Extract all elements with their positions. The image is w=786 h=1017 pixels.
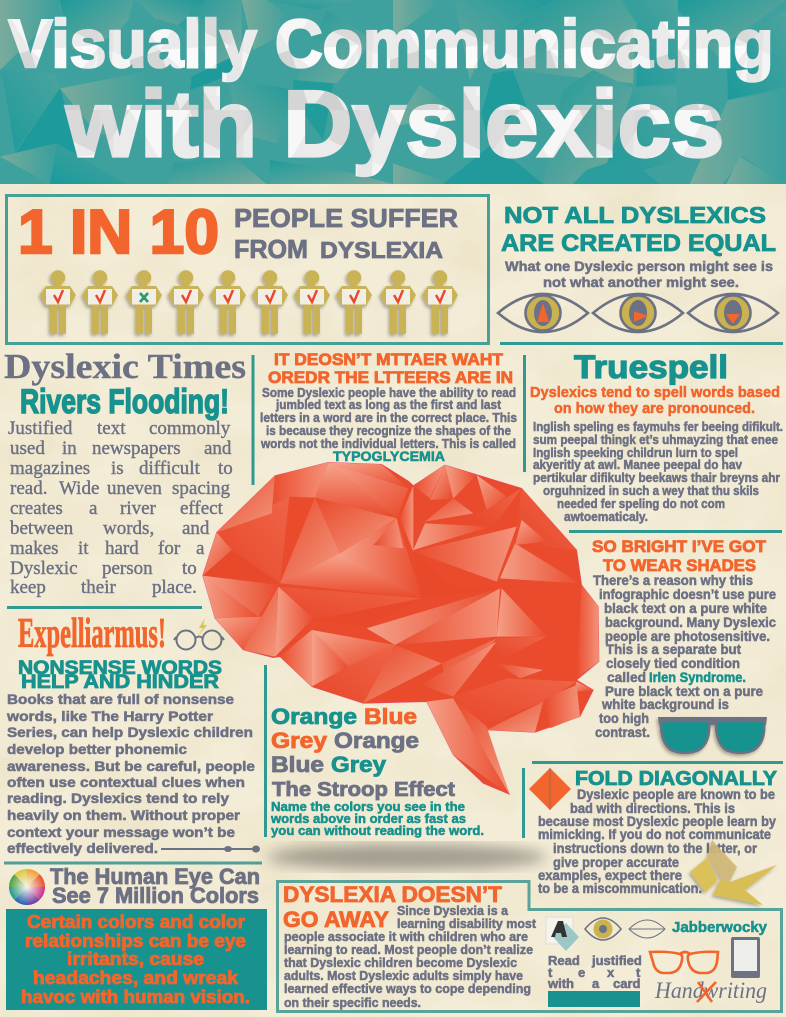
callout: [6, 909, 267, 1010]
justified paragraph: keep: [10, 577, 46, 598]
body text: TYPOGLYCEMIA: [333, 448, 445, 464]
subheading: on how they are pronounced.: [554, 400, 755, 417]
callout: headaches, and wreak: [33, 968, 239, 988]
justified paragraph: it: [78, 538, 89, 559]
body text: people associate it with children who are: [284, 929, 528, 944]
title line 2: with Dyslexics: [65, 71, 724, 176]
body text: effectively delivered.: [7, 840, 158, 856]
justified paragraph: magazines: [10, 458, 90, 479]
body text: on their specific needs.: [284, 995, 421, 1010]
icon: three eyes: [498, 294, 778, 332]
phonetic text: Inglish speeking childrun lurn to spel: [533, 445, 738, 460]
panel: typoglycemia: [252, 350, 517, 485]
subheading: Dyslexics tend to spell words based: [530, 384, 780, 401]
color words: [271, 704, 419, 777]
body text: heavily on them. Without proper: [7, 807, 241, 823]
body text: develop better phonemic: [7, 741, 187, 757]
heading: Truespell: [574, 349, 728, 385]
body text: jumbled text as long as the first and last: [275, 397, 502, 412]
heading: [268, 350, 513, 387]
body text: [538, 786, 776, 896]
body text: reading. Dyslexics tend to rely: [7, 790, 229, 806]
icon: orange glasses: [650, 952, 718, 973]
heading: FOLD DIAGONALLY: [575, 768, 778, 790]
instructions: words above in order as fast as: [270, 811, 466, 826]
justified paragraph: a: [196, 538, 205, 559]
justified paragraph: a: [89, 498, 98, 519]
justified paragraph: Dyslexic: [10, 558, 78, 579]
phonetic text: needed fer speling do not com: [557, 496, 725, 511]
panel: nonsense words: [4, 611, 262, 864]
subtext: What one Dyslexic person might see is: [505, 258, 773, 274]
body text: is because they recognize the shapes of the: [266, 423, 511, 438]
justified paragraph: person: [102, 558, 153, 579]
color words: Orange: [271, 704, 357, 729]
icon: paper crane: [690, 840, 777, 905]
justified paragraph: read.: [10, 478, 47, 499]
instructions: Name the colors you see in the: [271, 799, 465, 814]
color words: Grey: [331, 752, 387, 777]
justified paragraph: hard: [105, 538, 139, 559]
phonetic text: orguhnized in such a wey that thu skils: [543, 483, 759, 498]
body text: Series, can help Dyslexic children: [7, 724, 253, 740]
body text: context your message won’t be: [7, 824, 235, 840]
icon: crossed-out handwriting: Handwriting: [654, 978, 767, 1003]
icon: wand: [161, 846, 260, 852]
heading: HELP AND HINDER: [21, 672, 219, 693]
justified paragraph: makes: [10, 538, 59, 559]
justified card text: x: [607, 965, 615, 980]
title banner: [0, 0, 786, 184]
heading: SO BRIGHT I’VE GOT: [592, 537, 767, 556]
heading: [18, 658, 222, 693]
body text: too high: [599, 710, 649, 726]
heading: GO AWAY: [283, 907, 389, 932]
justified card text: t: [548, 965, 553, 980]
stat caption: FROM: [234, 234, 308, 264]
justified card text: card: [613, 976, 641, 991]
masthead: Dyslexic Times: [4, 347, 246, 386]
body text: examples, expect there: [538, 867, 682, 883]
justified paragraph: for: [158, 538, 181, 559]
heading: NOT ALL DYSLEXICS: [504, 202, 766, 228]
justified paragraph: and: [204, 438, 232, 459]
body text: words not the individual letters. This is called: [260, 436, 516, 451]
justified paragraph: creates: [10, 498, 63, 519]
heading: The Human Eye Can: [50, 864, 260, 889]
justified paragraph: their: [81, 577, 116, 598]
body text: words, like The Harry Potter: [6, 708, 214, 724]
justified paragraph: in: [62, 438, 77, 459]
justified paragraph: difficult: [139, 458, 201, 479]
body text: There’s a reason why this: [593, 572, 753, 588]
illustration: polygon brain: [203, 462, 599, 794]
body text: that Dyslexic children become Dyslexic: [284, 955, 517, 970]
body text: mimicking. If you do not communicate: [538, 826, 771, 842]
justified card text: Read: [548, 953, 580, 968]
justified paragraph: [8, 418, 233, 598]
body text: [284, 903, 537, 1010]
heading: NONSENSE WORDS: [18, 658, 222, 679]
instructions: you can without reading the word.: [271, 823, 484, 838]
body text: instructions down to the letter, or: [553, 840, 757, 856]
body text: called: [607, 669, 646, 685]
body text: background. Many Dyslexic: [605, 614, 776, 630]
icon: overlay tile: [546, 917, 579, 951]
heading: IT DEOSN’T MTTAER WAHT: [274, 350, 504, 369]
justified paragraph: spacing: [172, 478, 231, 499]
headline: Expelliarmus: Expelliarmus!: [18, 611, 166, 657]
phonetic text: [533, 419, 783, 524]
panel: truespell: [523, 349, 783, 533]
stat caption: PEOPLE SUFFER: [234, 203, 458, 233]
justified card text: a: [592, 976, 600, 991]
body text: Since Dyslexia is a: [397, 903, 509, 918]
pictogram: ten people: [40, 270, 458, 334]
justified paragraph: commonly: [149, 418, 231, 439]
body text: [260, 385, 517, 464]
panel: 1 in 10: [6, 196, 488, 344]
heading: See 7 Million Colors: [52, 883, 259, 908]
color words: Grey: [271, 728, 328, 753]
justified paragraph: text: [97, 418, 126, 439]
body text: Some Dyslexic people have the ability to read: [262, 385, 516, 400]
icon: sunglasses: [658, 717, 767, 753]
justified paragraph: to: [218, 458, 233, 479]
justified card text: [547, 953, 642, 1007]
callout: havoc with human vision.: [21, 987, 250, 1007]
body text: Pure black text on a pure: [605, 683, 763, 699]
justified paragraph: river: [120, 498, 157, 519]
color words: Orange: [334, 728, 419, 753]
body text: white background is: [601, 696, 729, 712]
justified paragraph: to: [182, 558, 197, 579]
phonetic text: akyeritly at awl. Manee peepal do hav: [533, 457, 743, 472]
justified paragraph: words,: [103, 518, 154, 539]
heading: OREDR THE LTTEERS ARE IN: [268, 368, 513, 387]
heading: TO WEAR SHADES: [603, 556, 756, 575]
body text: adults. Most Dyslexic adults simply have: [284, 968, 523, 983]
justified card text: t: [636, 965, 641, 980]
icon: tablet: [731, 937, 760, 978]
justified paragraph: newspapers: [92, 438, 181, 459]
body text: give proper accurate: [553, 854, 679, 870]
panel: not all dyslexics: [498, 202, 783, 345]
subheading: [530, 384, 780, 417]
subtext: [505, 258, 773, 290]
body text: closely tied condition: [606, 655, 740, 671]
justified paragraph: Wide: [59, 478, 99, 499]
panel: dyslexic times: [4, 347, 246, 609]
justified paragraph: is: [111, 458, 124, 479]
callout: Certain colors and color: [27, 912, 245, 932]
body text: This is a separate but: [606, 641, 741, 657]
panel: fold diagonally: [522, 761, 783, 905]
headline: Rivers Flooding!: [20, 383, 229, 421]
justified paragraph: effect: [180, 498, 224, 519]
icon: folded paper diamond: [529, 768, 571, 810]
body text: learning disability most: [397, 916, 537, 931]
callout: relationships can be eye: [25, 931, 246, 951]
body text: infographic doesn’t use pure: [599, 586, 776, 602]
panel: so bright: [592, 537, 776, 753]
heading: [50, 864, 260, 908]
body text: letters in a word are in the correct place. This: [260, 410, 517, 425]
icon: colour wheel: [9, 869, 45, 905]
body text: [6, 691, 255, 856]
body text: Books that are full of nonsense: [7, 691, 234, 707]
heading: [283, 882, 503, 932]
heading: The Stroop Effect: [272, 779, 455, 801]
justified card text: e: [578, 965, 585, 980]
body text: people are photosensitive.: [605, 628, 770, 644]
body text: bad with directions. This is: [570, 800, 735, 816]
justified paragraph: used: [10, 438, 45, 459]
body text: to be a miscommunication.: [538, 880, 702, 896]
justified paragraph: uneven: [107, 478, 162, 499]
heading: [501, 202, 776, 257]
justified paragraph: Justified: [8, 418, 73, 439]
instructions: [270, 799, 484, 838]
justified paragraph: and: [182, 518, 210, 539]
justified card text: with: [547, 976, 574, 991]
subtext: not what another might see.: [543, 274, 739, 290]
stat: 1 in 10: 1 IN 10: [18, 198, 219, 267]
body text: [593, 572, 776, 740]
body text: learned effective ways to cope depending: [284, 981, 531, 996]
label: jabberwocky: Jabberwocky: [672, 919, 768, 936]
panel: stroop effect: [264, 665, 484, 838]
body text: learning to read. Most people don’t realize: [284, 942, 533, 957]
justified paragraph: between: [10, 518, 74, 539]
justified paragraph: place.: [152, 577, 197, 598]
brain shadow: [267, 844, 547, 870]
color words: Blue: [271, 752, 324, 777]
icon: empty eye: [629, 920, 665, 938]
body text: often use contextual clues when: [7, 774, 245, 790]
panel: dyslexia doesn't go away: [278, 882, 782, 1012]
phonetic text: awtoematicaly.: [564, 509, 648, 524]
body text: Irlen Syndrome.: [649, 669, 746, 685]
heading: DYSLEXIA DOESN’T: [283, 882, 503, 907]
title line 1: Visually Communicating: [8, 6, 774, 82]
panel: human eye colors: [6, 864, 267, 1010]
icon: round glasses: [174, 618, 224, 650]
color words: Blue: [364, 704, 417, 729]
heading: ARE CREATED EQUAL: [501, 230, 776, 257]
heading: [592, 537, 767, 575]
callout: irritants, cause: [67, 949, 204, 969]
stat caption: DYSLEXIA: [320, 237, 443, 263]
icon: eye: [585, 918, 621, 940]
body text: awareness. But be careful, people: [7, 758, 255, 774]
justified card text: justified: [591, 953, 642, 968]
body text: black text on a pure white: [604, 600, 767, 616]
stat caption: [234, 203, 458, 264]
body text: contrast.: [595, 724, 650, 740]
